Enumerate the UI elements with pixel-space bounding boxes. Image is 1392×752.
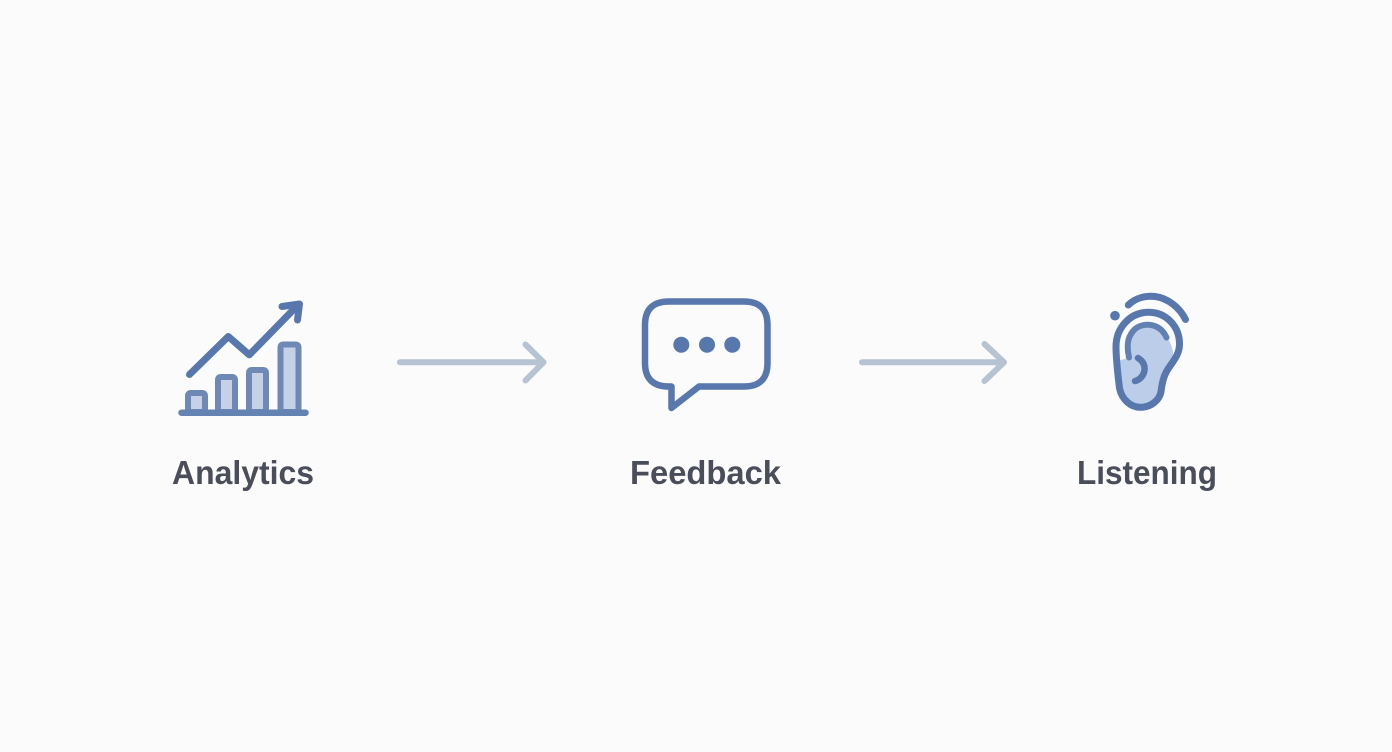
- sound dot: [1110, 311, 1120, 321]
- chart baseline: [182, 409, 306, 416]
- icon: speech bubble: [645, 302, 768, 408]
- label: Analytics: Analytics: [172, 454, 314, 491]
- sound wave arc: [1128, 296, 1186, 320]
- arrow: feedback to listening: [862, 344, 1004, 381]
- step: analytics: [172, 304, 314, 491]
- arrow: analytics to feedback: [400, 344, 544, 380]
- ear outline: [1116, 312, 1180, 407]
- step: listening: [1077, 296, 1217, 491]
- ear inner fill: [1118, 325, 1173, 407]
- icon: ear with sound wave: [1110, 296, 1186, 407]
- trend arrow: [190, 304, 300, 374]
- icon: bar chart with rising arrow: [182, 304, 306, 413]
- typing dots: [673, 337, 740, 353]
- chart bars: [188, 344, 298, 412]
- label: Listening: Listening: [1077, 454, 1217, 491]
- bubble outline: [645, 302, 768, 408]
- inner ear fold: [1128, 325, 1166, 358]
- ear canal curve: [1135, 358, 1145, 381]
- step: feedback: [630, 302, 782, 491]
- label: Feedback: Feedback: [630, 454, 782, 491]
